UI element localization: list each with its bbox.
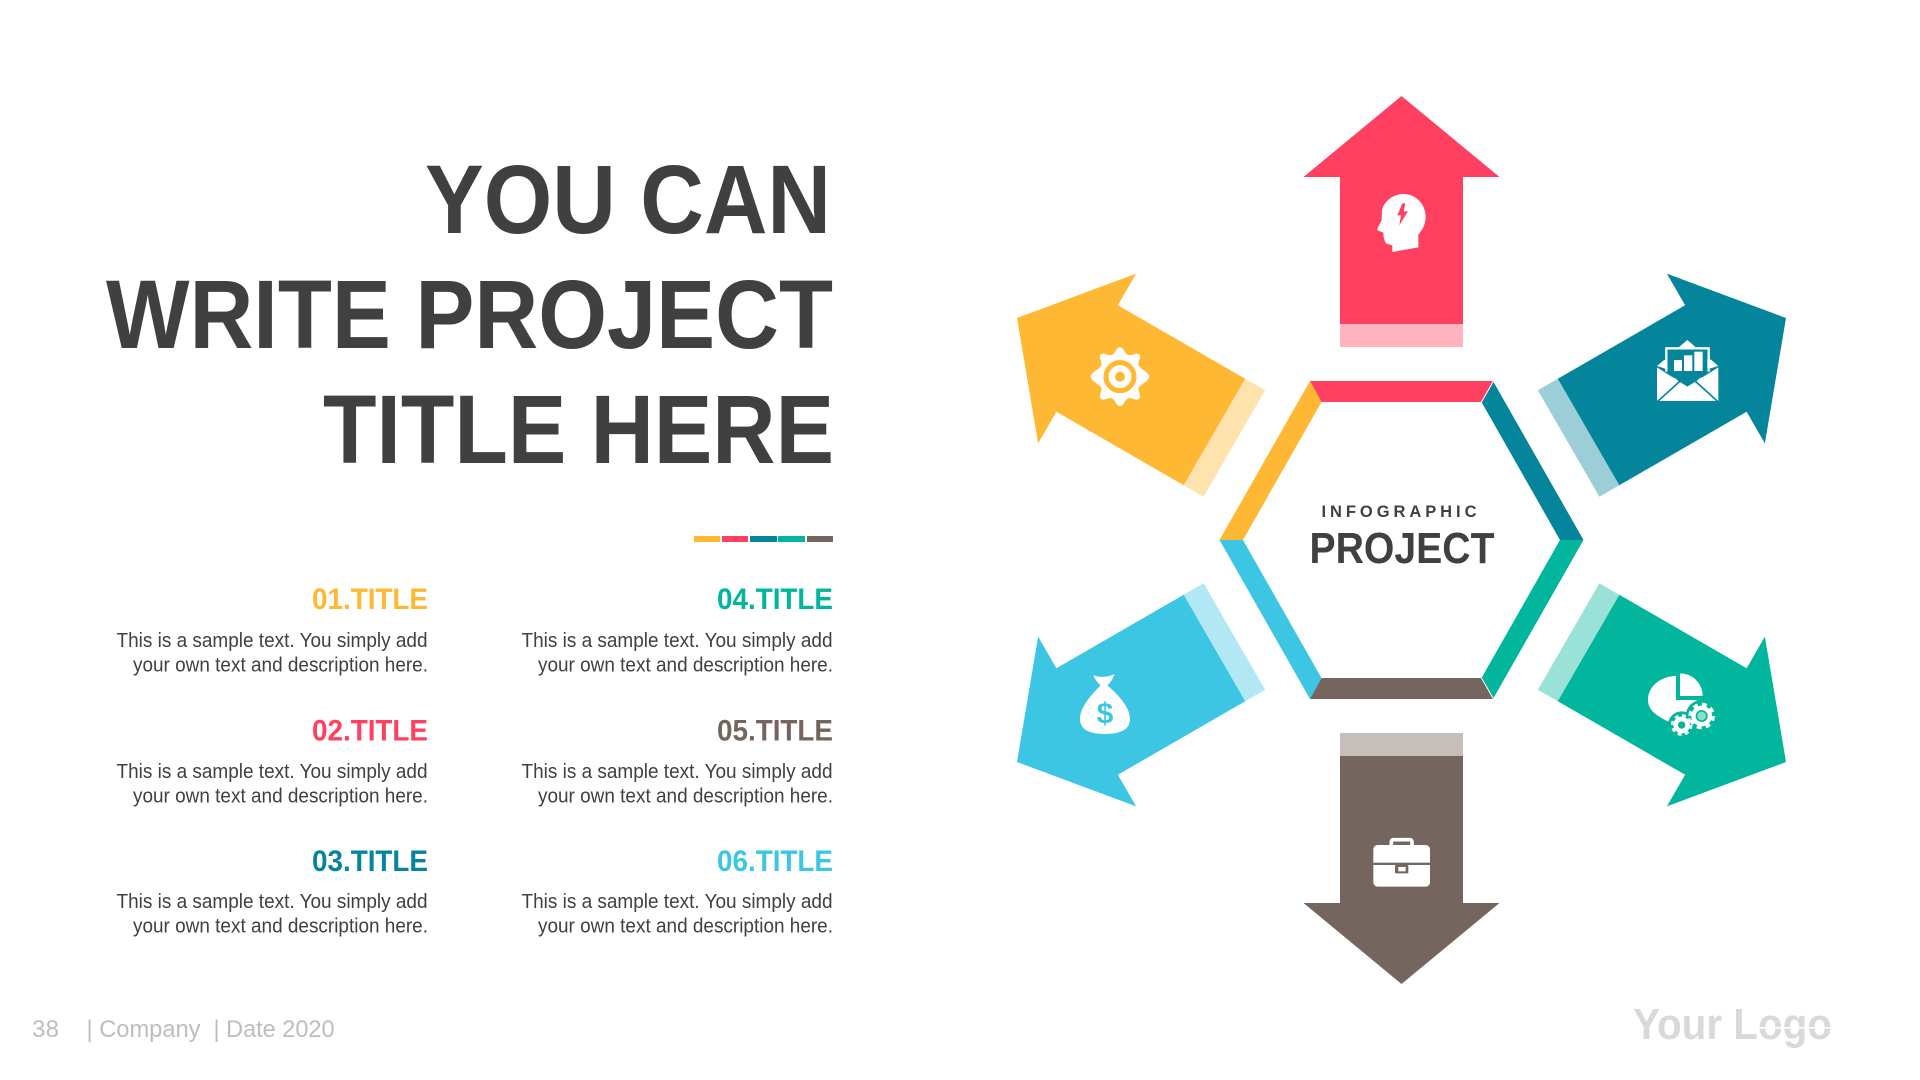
text block 05: 05.TITLE <box>717 714 833 748</box>
icon: envelope with chart <box>1657 340 1718 402</box>
arrow: upper right teal <box>1520 233 1835 528</box>
icon: money bag <box>1080 674 1130 734</box>
logo: Your Logo <box>1633 1000 1832 1049</box>
hexagon label <box>1310 503 1495 573</box>
title: YOU CAN <box>425 145 831 254</box>
arrow: down brown <box>1304 733 1500 984</box>
text block 03: 03.TITLE <box>312 845 428 878</box>
text block 03: This is a sample text. You simply add <box>116 890 428 913</box>
central hexagon ring <box>1220 381 1584 699</box>
text block 01: 01.TITLE <box>312 583 428 616</box>
title <box>106 145 834 484</box>
text block 02: your own text and description here. <box>133 784 428 808</box>
text block 05: This is a sample text. You simply add <box>522 760 832 783</box>
text block 05: your own text and description here. <box>538 784 833 808</box>
text block 06: your own text and description here. <box>538 914 833 938</box>
text block 06: This is a sample text. You simply add <box>522 890 832 913</box>
text block 04: 04.TITLE <box>717 583 833 616</box>
text block 01 <box>116 583 428 676</box>
text block 03: your own text and description here. <box>133 914 428 938</box>
arrow: lower right green <box>1520 552 1835 847</box>
hexagon label: PROJECT <box>1310 524 1495 573</box>
text block 04 <box>522 583 833 676</box>
text block 06: 06.TITLE <box>717 845 833 878</box>
text block 01: This is a sample text. You simply add <box>116 629 428 652</box>
title: TITLE HERE <box>323 375 834 484</box>
title: WRITE PROJECT <box>106 260 833 369</box>
text block 02 <box>116 714 428 808</box>
icon: pie chart and gears <box>1648 673 1718 739</box>
text block 06 <box>522 845 833 938</box>
footer: | Date 2020 <box>214 1016 334 1043</box>
text block 04: This is a sample text. You simply add <box>522 629 832 652</box>
icon: gear <box>1091 347 1149 406</box>
colour accent bar <box>694 536 833 542</box>
arrow: lower left blue <box>968 552 1283 847</box>
text block 01: your own text and description here. <box>133 654 428 676</box>
footer: | Company <box>86 1016 200 1043</box>
hexagon label: INFOGRAPHIC <box>1322 503 1477 521</box>
text block 04: your own text and description here. <box>538 654 833 676</box>
text block 05 <box>522 714 833 808</box>
text block 02: 02.TITLE <box>312 714 428 748</box>
footer: 38 <box>32 1016 59 1043</box>
icon: briefcase <box>1373 840 1430 887</box>
footer <box>32 1016 334 1043</box>
icon: money bag: $ <box>1097 697 1114 730</box>
arrow: up red <box>1304 96 1500 347</box>
text block 03 <box>116 845 428 938</box>
text block 02: This is a sample text. You simply add <box>116 760 428 783</box>
arrow: upper left orange <box>968 233 1283 528</box>
icon: head with lightning <box>1377 194 1426 252</box>
